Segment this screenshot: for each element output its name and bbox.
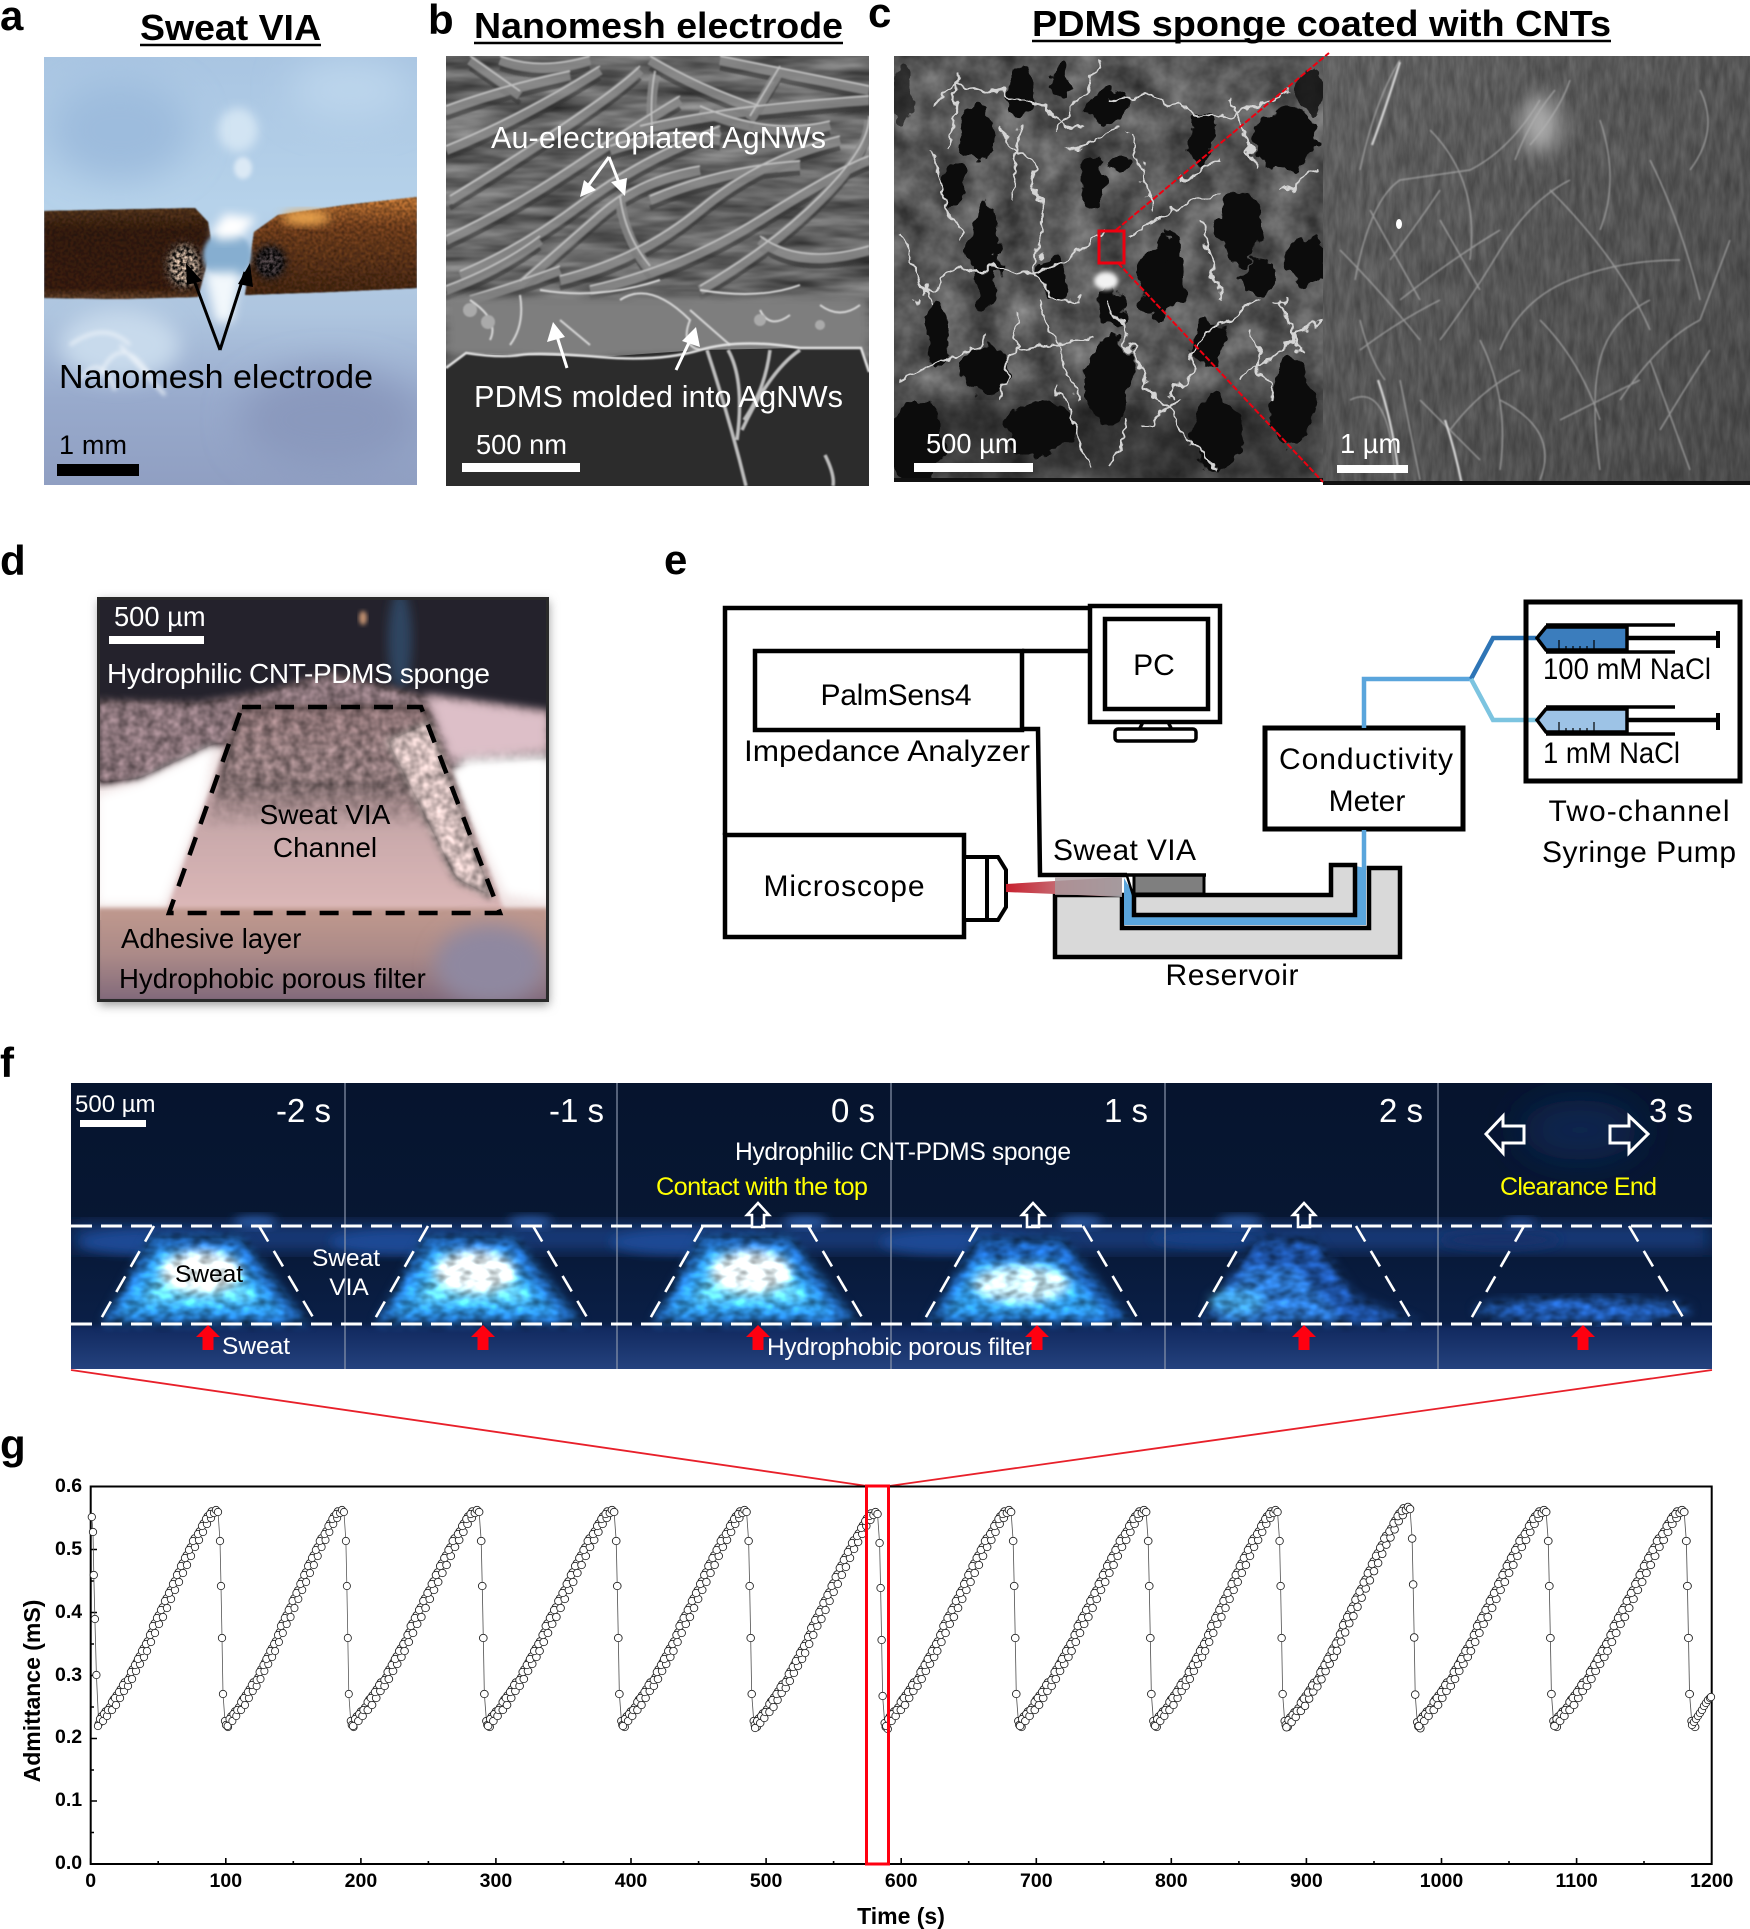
panel letter e: e — [664, 536, 687, 583]
box: Conductivity Meter — [1265, 728, 1463, 829]
panel c: PDMS sponge coated with CNTs — [868, 0, 1750, 485]
time stamps: -1 s — [549, 1092, 604, 1129]
y axis tick labels: 0.0 — [55, 1852, 82, 1874]
x axis tick labels: 0 — [85, 1870, 96, 1892]
x axis tick labels: 300 — [480, 1870, 512, 1892]
time stamps: 0 s — [831, 1092, 875, 1129]
label: Two-channel Syringe Pump — [1542, 795, 1736, 869]
label: Sweat VIA: Sweat VIA — [1053, 834, 1196, 867]
y axis tick labels: 0.2 — [55, 1726, 82, 1748]
label: Two-channel Syringe Pump: Syringe Pump — [1542, 836, 1736, 869]
scale bar 500 nm: 500 nm — [476, 429, 567, 460]
box: two-channel syringe pump: 100 mM NaCl — [1543, 653, 1711, 686]
time stamps — [276, 1092, 1693, 1129]
syringe: 1 mM NaCl — [1537, 707, 1718, 734]
label: Sweat input: Sweat — [222, 1333, 290, 1360]
red sweat arrows — [196, 1325, 1595, 1350]
label: Nanomesh electrode with arrows: Nanomesh electrode — [59, 358, 373, 395]
scale bar 500 nm — [462, 429, 580, 472]
time stamps: -2 s — [276, 1092, 331, 1129]
x axis tick labels: 500 — [750, 1870, 783, 1892]
reservoir with sweat VIA device — [1006, 865, 1400, 957]
time stamps: 3 s — [1649, 1092, 1693, 1129]
time stamps: 1 s — [1104, 1092, 1148, 1129]
data series: sawtooth admittance — [92, 1507, 1711, 1729]
heading: PDMS sponge coated with CNTs: PDMS sponge coated with CNTs — [1032, 3, 1611, 44]
x axis tick labels: 700 — [1020, 1870, 1053, 1892]
x axis tick labels — [85, 1870, 1734, 1892]
red connector lines from strip to chart — [71, 1370, 1712, 1486]
box: PalmSens4 impedance analyzer: PalmSens4 — [820, 679, 972, 712]
icon: microscope — [725, 835, 1006, 937]
panel a: Sweat VIA — [0, 0, 420, 485]
scale bar 1 µm: 1 µm — [1340, 428, 1401, 459]
label: Sweat VIA Channel: Channel — [273, 832, 377, 863]
label: Sweat VIA — [312, 1245, 380, 1301]
white up arrows — [747, 1203, 1315, 1227]
label: Nanomesh electrode with arrows — [59, 263, 373, 395]
label: Hydrophilic CNT-PDMS sponge: Hydrophilic CNT-PDMS sponge — [107, 658, 490, 689]
blue tubes — [1364, 638, 1536, 870]
scale bar 500 µm: 500 µm — [926, 428, 1018, 459]
hollow arrow left — [1486, 1116, 1524, 1153]
dashed trapezoid outline — [169, 707, 500, 913]
panel f: time-lapse frames — [0, 1039, 1712, 1369]
label: Au-electroplated AgNWs with arrows: Au-electroplated AgNWs — [491, 121, 826, 155]
label: PDMS molded into AgNWs with arrows — [474, 322, 843, 414]
x axis tick labels: 900 — [1290, 1870, 1323, 1892]
wires — [725, 608, 1127, 875]
panel g: admittance chart — [0, 1421, 1734, 1929]
hollow arrow right — [1610, 1116, 1648, 1153]
label: Sweat VIA Channel: Sweat VIA — [260, 799, 391, 830]
label: Reservoir: Reservoir — [1166, 959, 1298, 992]
label: Adhesive layer: Adhesive layer — [121, 923, 301, 954]
label: PDMS molded into AgNWs with arrows: PDMS molded into AgNWs — [474, 379, 843, 414]
icon: microscope: Microscope — [764, 870, 924, 903]
label: Sweat VIA: VIA — [329, 1274, 369, 1301]
red selection box — [866, 1486, 888, 1864]
SEM image: carbon nanotubes zoomed — [1323, 56, 1750, 485]
y axis title: Admittance (mS) — [19, 1600, 45, 1782]
SEM image: porous sponge — [894, 56, 1323, 482]
x axis tick labels: 800 — [1155, 1870, 1188, 1892]
label: Au-electroplated AgNWs with arrows — [491, 121, 826, 197]
photo: sweat via gap in electrode — [44, 57, 417, 485]
y axis tick labels: 0.1 — [55, 1789, 82, 1811]
panel e: experimental setup schematic — [664, 536, 1740, 992]
scale bar 500 µm — [914, 428, 1033, 472]
label: Hydrophobic porous filter: Hydrophobic porous filter — [767, 1334, 1033, 1361]
x axis tick labels: 100 — [210, 1870, 242, 1892]
time stamps: 2 s — [1379, 1092, 1423, 1129]
label: Hydrophobic porous filter: Hydrophobic porous filter — [119, 963, 426, 994]
label: Clearance End: Clearance End — [1500, 1173, 1657, 1201]
x axis tick labels: 1000 — [1420, 1870, 1463, 1892]
scale bar 500 µm: 500 µm — [75, 1091, 156, 1118]
y axis tick labels: 0.6 — [55, 1475, 82, 1497]
plot frame and ticks — [91, 1486, 1712, 1864]
icon: PC monitor: PC — [1133, 649, 1175, 682]
panel letter f: f — [0, 1039, 15, 1086]
y axis tick labels — [55, 1475, 82, 1874]
fluorescent image strip — [71, 1083, 1712, 1369]
scale bar 1 mm: 1 mm — [59, 430, 127, 460]
panel b: Nanomesh electrode — [428, 0, 869, 486]
x axis title: Time (s) — [857, 1903, 945, 1929]
box: two-channel syringe pump — [1526, 602, 1740, 781]
x axis tick labels: 200 — [345, 1870, 377, 1892]
x axis tick labels: 1100 — [1555, 1870, 1598, 1892]
heading: Sweat VIA: Sweat VIA — [140, 7, 321, 48]
photo: microscope view of channel — [97, 597, 549, 1002]
y axis tick labels: 0.3 — [55, 1664, 82, 1686]
x axis tick labels: 1200 — [1690, 1870, 1734, 1892]
panel letter d: d — [0, 537, 26, 584]
zoom box and dashed red lines — [1099, 53, 1329, 482]
panel d: cross section of Sweat VIA — [0, 537, 549, 1005]
panel letter g: g — [0, 1421, 26, 1468]
SEM image: nanowires — [446, 56, 869, 486]
x axis tick labels: 400 — [615, 1870, 647, 1892]
label: Two-channel Syringe Pump: Two-channel — [1548, 795, 1730, 828]
dashed guide lines and channel outlines — [71, 1226, 1712, 1324]
syringe: 100 mM NaCl — [1537, 625, 1718, 652]
label: Sweat VIA Channel — [260, 799, 391, 863]
heading: Nanomesh electrode: Nanomesh electrode — [474, 5, 843, 46]
y axis tick labels: 0.4 — [55, 1601, 82, 1623]
label: Contact with the top: Contact with the top — [656, 1173, 868, 1201]
scale bar 1 mm — [57, 430, 139, 476]
label: Sweat inside channel: Sweat — [175, 1261, 243, 1288]
label: Impedance Analyzer: Impedance Analyzer — [744, 735, 1030, 768]
icon: PC monitor — [1090, 606, 1220, 741]
box: Conductivity Meter: Meter — [1329, 785, 1405, 818]
box: two-channel syringe pump: 1 mM NaCl — [1543, 737, 1680, 770]
scale bar 500 µm: 500 µm — [114, 601, 206, 632]
scale bar 1 µm — [1337, 428, 1408, 473]
label: Hydrophilic CNT-PDMS sponge: Hydrophilic CNT-PDMS sponge — [735, 1139, 1071, 1166]
y axis tick labels: 0.5 — [55, 1538, 82, 1560]
scale bar 500 µm — [109, 601, 206, 644]
box: PalmSens4 impedance analyzer — [755, 651, 1022, 730]
label: Sweat VIA: Sweat — [312, 1245, 380, 1272]
box: Conductivity Meter: Conductivity — [1279, 743, 1453, 776]
x axis tick labels: 600 — [885, 1870, 918, 1892]
